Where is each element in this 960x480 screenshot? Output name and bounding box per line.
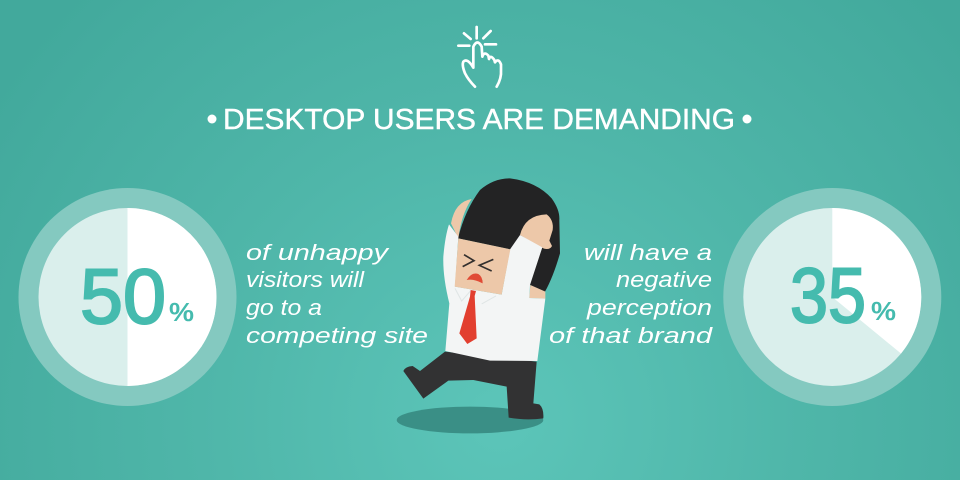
title: DESKTOP USERS ARE DEMANDING (223, 104, 735, 136)
text: left caption: competing site (246, 323, 428, 348)
collar (455, 288, 496, 304)
icon: tapping hand (458, 27, 501, 87)
trousers and shoes (403, 352, 543, 419)
text: right caption: perception (586, 295, 712, 320)
text: left caption (246, 240, 428, 348)
shadow (397, 407, 543, 433)
text: left caption: of unhappy (246, 240, 390, 265)
percent sign: % (169, 297, 194, 327)
text: left caption: go to a (246, 295, 322, 320)
35 number: 35 (790, 251, 866, 339)
shirt (443, 224, 545, 361)
donut: 35% (723, 188, 941, 406)
neck skin (529, 285, 545, 299)
right hand (520, 214, 553, 249)
eyes (463, 255, 493, 271)
donut: 50% (18, 188, 236, 406)
text: right caption: negative (616, 267, 712, 292)
percent sign: % (871, 296, 896, 326)
hair (458, 178, 560, 292)
illustration: stressed businessman (397, 178, 560, 433)
mouth (467, 273, 483, 283)
tie (459, 290, 477, 344)
50 number: 50 (80, 252, 166, 340)
face (455, 238, 510, 295)
left arm skin (451, 199, 472, 238)
text: left caption: visitors will (246, 267, 365, 292)
text: right caption: will have a (584, 240, 712, 265)
text: right caption: of that brand (549, 323, 714, 348)
text: right caption (549, 240, 714, 348)
